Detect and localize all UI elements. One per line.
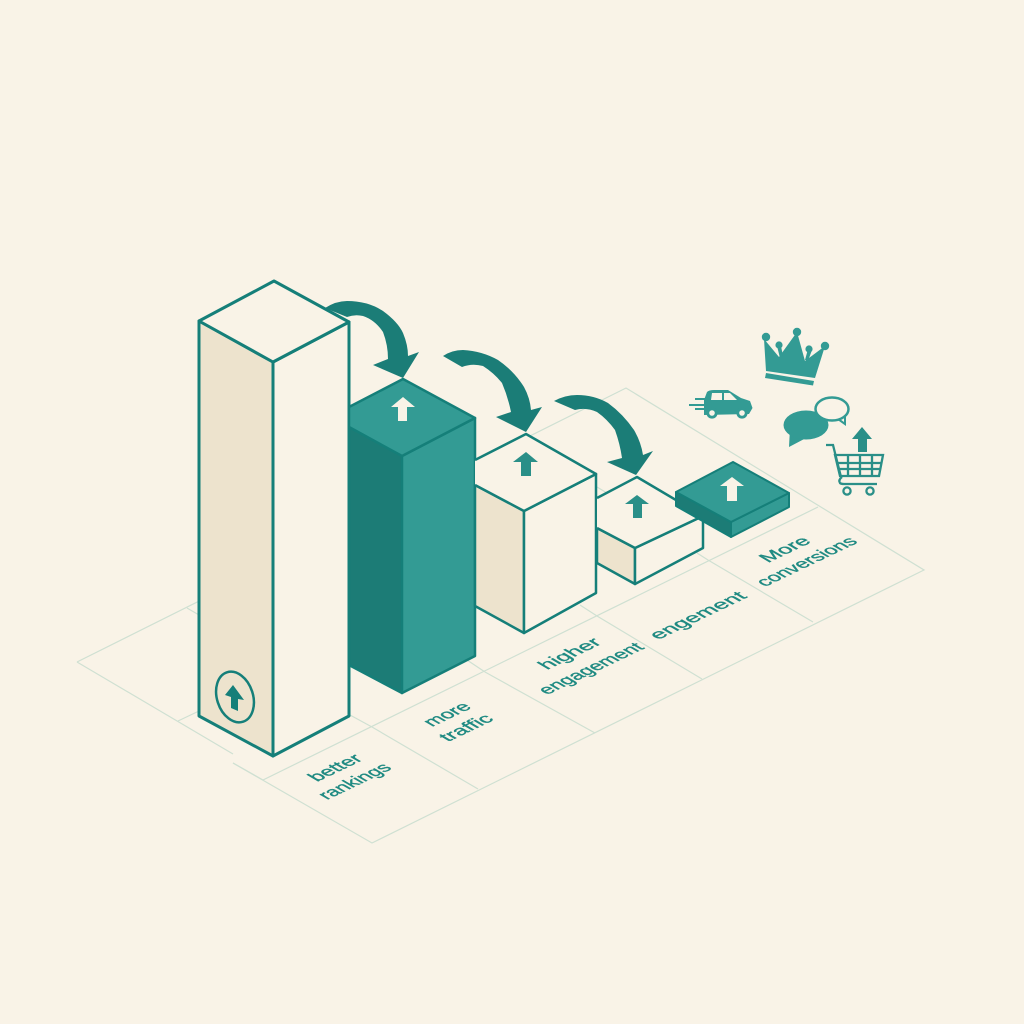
bar 3: higher engagement — [475, 434, 596, 633]
label: more traffic: traffic — [435, 712, 499, 744]
icon: car — [689, 390, 752, 419]
label: more conversions: More — [755, 534, 816, 565]
arrow: rankings to traffic — [325, 301, 419, 378]
bar 2: more traffic — [349, 379, 475, 693]
label: more conversions: conversions — [752, 534, 863, 589]
arrow: engagement to next step — [554, 395, 653, 475]
arrow: traffic to engagement — [443, 350, 542, 432]
bar 1: better rankings — [199, 281, 349, 756]
bar 4: engagement — [597, 477, 703, 584]
label: higher engagement: engagement — [534, 640, 650, 697]
label: higher engagement: higher — [534, 635, 608, 672]
label: better rankings: better — [304, 752, 369, 784]
icon: circled up arrow — [210, 667, 260, 727]
icon: crown — [762, 328, 829, 386]
icon: teal up arrow — [513, 452, 538, 476]
icon: white up arrow — [391, 397, 415, 421]
icon: shopping cart with up arrow — [826, 427, 883, 495]
label: engement: engement — [645, 589, 753, 642]
isometric floor grid — [77, 388, 924, 843]
label: better rankings: rankings — [314, 761, 397, 802]
label: more traffic: more — [419, 700, 477, 729]
icon: teal up arrow — [625, 495, 649, 518]
icon: white up arrow — [720, 477, 744, 501]
label: more traffic — [419, 700, 499, 744]
bar 5: more conversions — [676, 462, 789, 537]
icon: speech bubbles — [784, 398, 848, 447]
